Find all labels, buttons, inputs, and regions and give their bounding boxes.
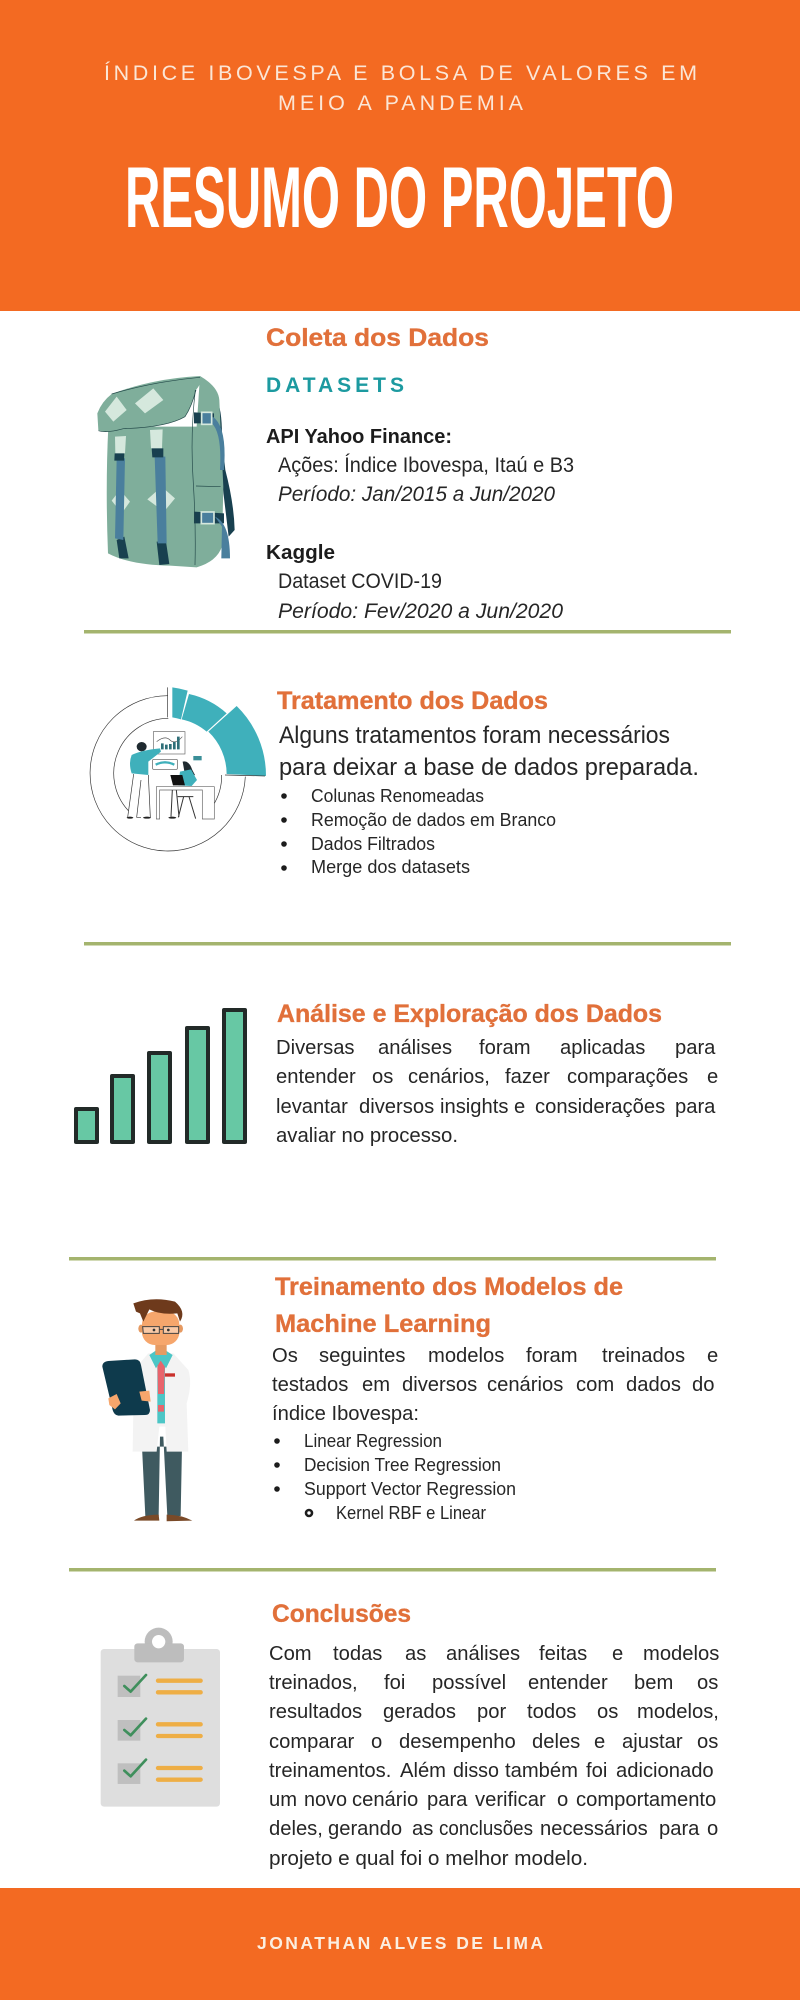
text block: novo: [304, 1789, 347, 1811]
text block: as: [405, 1643, 426, 1665]
heading: Conclusões: [272, 1600, 411, 1628]
text block: modelos: [428, 1345, 504, 1367]
footer banner: [0, 1888, 800, 2000]
bullet list: Remoção de dados em Branco: [311, 810, 556, 830]
text block: análises: [378, 1037, 452, 1059]
text block: todas: [333, 1643, 382, 1665]
text block: e: [707, 1066, 718, 1088]
text block: treinados: [602, 1345, 685, 1367]
text block: seguintes: [319, 1345, 405, 1367]
icon: data team in circular chart: [90, 687, 266, 851]
text block: foi: [384, 1672, 405, 1694]
text block: todos: [527, 1701, 576, 1723]
text block: yahoo finance: API Yahoo Finance:: [266, 426, 452, 448]
text block: entender: [276, 1066, 356, 1088]
text block: necessários: [540, 1818, 648, 1840]
text block: deles,: [269, 1818, 323, 1840]
text block: projeto e qual foi o melhor modelo.: [269, 1848, 588, 1870]
text block: índice Ibovespa:: [272, 1403, 419, 1425]
text block: yahoo finance: Período: Jan/2015 a Jun/2020: [278, 483, 555, 506]
text block: diversos: [359, 1096, 434, 1118]
heading: Tratamento dos Dados: [277, 687, 548, 715]
bar chart icon: [76, 1010, 245, 1142]
text block: modelos,: [637, 1701, 719, 1723]
text block: considerações: [535, 1096, 665, 1118]
text block: [276, 1037, 718, 1147]
text block: [279, 722, 699, 781]
text block: avaliar no processo.: [276, 1125, 458, 1147]
heading: Coleta dos Dados: [266, 324, 489, 352]
text block: foram: [526, 1345, 578, 1367]
text block: o: [557, 1789, 568, 1811]
text block: treinamentos.: [269, 1760, 391, 1782]
text block: yahoo finance: [266, 426, 574, 506]
bullet list: Merge dos datasets: [311, 857, 470, 877]
bullet list: Kernel RBF e Linear: [336, 1503, 486, 1523]
text block: para: [427, 1789, 468, 1811]
text block: foi: [586, 1760, 607, 1782]
text block: gerados: [383, 1701, 456, 1723]
panel: coleta dos dados: [97, 324, 574, 623]
text block: para: [659, 1818, 700, 1840]
text block: para: [675, 1096, 716, 1118]
text block: testados: [272, 1374, 348, 1396]
text block: resultados: [269, 1701, 362, 1723]
text block: os: [697, 1672, 718, 1694]
text block: entender: [528, 1672, 608, 1694]
text block: um: [269, 1789, 297, 1811]
text block: Com: [269, 1643, 312, 1665]
text block: verificar: [475, 1789, 546, 1811]
text block: Alguns tratamentos foram necessários: [279, 722, 670, 749]
text block: [272, 1345, 718, 1425]
text block: kaggle: Kaggle: [266, 542, 335, 564]
text block: comparar: [269, 1731, 355, 1753]
text block: disso: [453, 1760, 499, 1782]
text block: adicionado: [616, 1760, 714, 1782]
text block: os: [597, 1701, 618, 1723]
text block: foram: [479, 1037, 531, 1059]
text block: comparações: [567, 1066, 688, 1088]
subtitle: [104, 60, 697, 115]
bullet list: Linear Regression: [304, 1431, 442, 1451]
text block: kaggle: [266, 542, 563, 623]
text block: [269, 1643, 719, 1870]
text block: deles: [532, 1731, 580, 1753]
bullet list: Dados Filtrados: [311, 834, 435, 854]
heading: Machine Learning: [275, 1310, 491, 1338]
icon: clipboard checklist: [101, 1628, 220, 1807]
text block: cenários,: [408, 1066, 490, 1088]
text block: modelos: [643, 1643, 719, 1665]
panel: treinamento dos modelos: [102, 1273, 718, 1523]
text block: feitas: [539, 1643, 587, 1665]
text block: treinados,: [269, 1672, 358, 1694]
text block: análises: [446, 1643, 520, 1665]
icon: backpack: [97, 376, 235, 567]
text block: Os: [272, 1345, 298, 1367]
text block: cenários: [487, 1374, 563, 1396]
heading: [275, 1273, 623, 1338]
text block: cenário: [352, 1789, 418, 1811]
text block: e: [594, 1731, 605, 1753]
text block: por: [477, 1701, 506, 1723]
subtitle: MEIO A PANDEMIA: [278, 91, 524, 115]
text block: aplicadas: [560, 1037, 645, 1059]
subheading: datasets: DATASETS: [266, 374, 404, 397]
text block: os: [372, 1066, 393, 1088]
header banner: [0, 0, 800, 311]
heading: Análise e Exploração dos Dados: [277, 1000, 662, 1028]
bullet list: Decision Tree Regression: [304, 1455, 501, 1475]
panel: analise e exploracao: [76, 1000, 718, 1147]
text block: kaggle: Período: Fev/2020 a Jun/2020: [278, 600, 563, 623]
text block: yahoo finance: Ações: Índice Ibovespa, Itaú e B3: [278, 454, 574, 477]
text block: insights: [440, 1096, 508, 1118]
icon: scientist with tablet: [102, 1299, 192, 1521]
text block: e: [707, 1345, 718, 1367]
text block: para deixar a base de dados preparada.: [279, 754, 699, 781]
text block: o: [707, 1818, 718, 1840]
bullet list: [274, 1431, 516, 1523]
text block: conclusões: [439, 1818, 533, 1840]
text block: levantar: [276, 1096, 348, 1118]
bullet list: [281, 786, 556, 877]
text block: com: [576, 1374, 614, 1396]
text block: também: [505, 1760, 578, 1782]
text block: Além: [400, 1760, 446, 1782]
text block: as: [412, 1818, 433, 1840]
text block: possível: [432, 1672, 506, 1694]
text block: para: [675, 1037, 716, 1059]
bullet list: Colunas Renomeadas: [311, 786, 484, 806]
text block: dados: [626, 1374, 681, 1396]
text block: ajustar: [622, 1731, 683, 1753]
bullet list: Support Vector Regression: [304, 1479, 516, 1499]
author name: JONATHAN ALVES DE LIMA: [257, 1933, 543, 1953]
text block: gerando: [328, 1818, 402, 1840]
heading: Treinamento dos Modelos de: [275, 1273, 623, 1301]
text block: e: [612, 1643, 623, 1665]
text block: diversos: [402, 1374, 477, 1396]
text block: kaggle: Dataset COVID-19: [278, 570, 442, 593]
text block: bem: [634, 1672, 673, 1694]
panel: tratamento dos dados: [90, 687, 699, 877]
text block: do: [692, 1374, 714, 1396]
text block: Diversas: [276, 1037, 355, 1059]
text block: e: [514, 1096, 525, 1118]
text block: em: [362, 1374, 390, 1396]
text block: desempenho: [399, 1731, 516, 1753]
panel: conclusoes: [101, 1600, 719, 1870]
text block: comportamento: [576, 1789, 716, 1811]
text block: o: [371, 1731, 382, 1753]
subtitle: ÍNDICE IBOVESPA E BOLSA DE VALORES EM: [104, 60, 697, 85]
text block: fazer: [505, 1066, 550, 1088]
text block: os: [697, 1731, 718, 1753]
